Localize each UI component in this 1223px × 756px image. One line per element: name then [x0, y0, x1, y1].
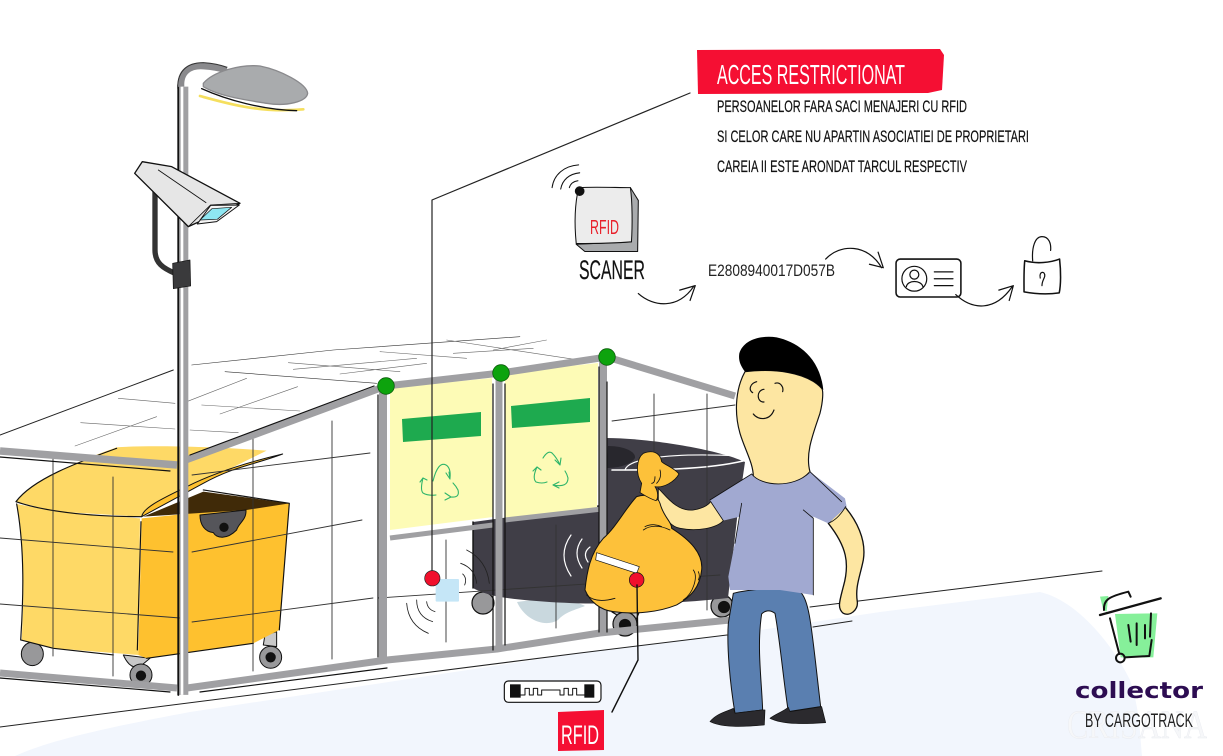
- notice line 1: PERSOANELOR FARA SACI MENAJERI CU RFID: [717, 97, 967, 116]
- right arm: [828, 505, 864, 614]
- RFID text: RFID: [561, 720, 599, 750]
- leader line from bag tag: [612, 585, 638, 712]
- arrow code to card: [826, 248, 883, 268]
- lamp arm: [181, 66, 227, 87]
- camera body: [135, 162, 240, 227]
- garbage bag: [585, 495, 702, 613]
- bin shadow: [517, 600, 585, 623]
- lamp light: [200, 96, 303, 110]
- bin right face: [138, 503, 289, 658]
- process arrows and icons: [638, 237, 1061, 306]
- yellow panel right: [505, 363, 598, 518]
- reader box: [436, 579, 459, 602]
- signal waves on bin: [564, 535, 590, 576]
- logo name: collector: [1075, 679, 1203, 704]
- green bar left: [402, 412, 481, 442]
- ID card icon: [896, 259, 961, 297]
- reader signal waves: [407, 550, 489, 633]
- lamp head: [203, 66, 308, 104]
- bin outline: [16, 448, 289, 658]
- head: [736, 371, 823, 485]
- jeans: [728, 589, 821, 713]
- logo bin icon: [1100, 592, 1161, 662]
- hair: [739, 337, 823, 390]
- floor grid behind fence: [0, 337, 590, 446]
- scanner dot: [575, 186, 585, 196]
- scanner signal waves: [552, 165, 580, 189]
- fence panels: [390, 363, 598, 530]
- street lamp with camera: [135, 63, 308, 695]
- antenna coil: [521, 688, 584, 695]
- Collector logo: [1067, 592, 1207, 747]
- RFID code: E2808940017D057B: [708, 261, 835, 280]
- bin lid flap: [142, 454, 283, 517]
- notice line 2: SI CELOR CARE NU APARTIN ASOCIATIEI DE PROPRIETARI: [717, 127, 1029, 146]
- bin wheels: [21, 632, 282, 686]
- banner title: ACCES RESTRICTIONAT: [717, 59, 905, 90]
- wall reader: [407, 550, 489, 633]
- RFID scanner icon: [552, 165, 638, 251]
- arrow card to lock: [956, 286, 1013, 306]
- green joint dots: [378, 349, 615, 394]
- fence post outlines: [0, 367, 607, 692]
- scanner label: RFID: [590, 217, 619, 239]
- camera clamp: [173, 260, 191, 289]
- bin opening: [143, 492, 289, 517]
- recycle icon left: [420, 464, 458, 500]
- scanner label: SCANER: [579, 255, 645, 285]
- RFID tag antenna: [504, 681, 601, 702]
- fence rails: [0, 357, 735, 688]
- RFID tag on bag: [596, 553, 639, 573]
- antenna pads: [510, 684, 521, 698]
- access notice: [697, 49, 1029, 176]
- bag red dot: [629, 573, 644, 587]
- green bar right: [511, 398, 590, 428]
- face: [750, 382, 783, 419]
- left arm: [658, 488, 723, 530]
- recycle icon right: [533, 452, 568, 488]
- lamp pole: [171, 87, 197, 695]
- man with garbage bag: [585, 337, 864, 726]
- metal fence frame: [0, 349, 735, 692]
- bin left face and lid: [16, 446, 267, 517]
- leader line to access notice: [432, 93, 690, 578]
- bin body: [473, 438, 745, 604]
- antenna frame: [504, 681, 601, 702]
- red banner: [697, 49, 944, 94]
- yellow panel left: [390, 378, 493, 530]
- red square: [558, 710, 604, 751]
- RFID red label: [558, 710, 604, 751]
- ground: [15, 592, 1142, 756]
- bag creases: [587, 470, 699, 600]
- bag knot: [637, 452, 679, 501]
- scanner face: [575, 187, 632, 244]
- notice line 3: CAREIA II ESTE ARONDAT TARCUL RESPECTIV: [717, 157, 967, 176]
- fence wires: [0, 394, 735, 676]
- black bin wheels: [472, 592, 733, 636]
- t-shirt: [710, 472, 847, 595]
- camera cable: [155, 190, 175, 273]
- padlock icon: [1024, 237, 1061, 294]
- ground lines: [0, 571, 1102, 727]
- scanner side: [576, 188, 638, 251]
- black waste bin: [472, 438, 745, 636]
- camera lens: [197, 205, 239, 224]
- arrow scanner to code: [638, 286, 695, 304]
- yellow waste bin: [16, 446, 289, 686]
- shoes: [710, 708, 765, 726]
- reader red dot: [425, 571, 440, 586]
